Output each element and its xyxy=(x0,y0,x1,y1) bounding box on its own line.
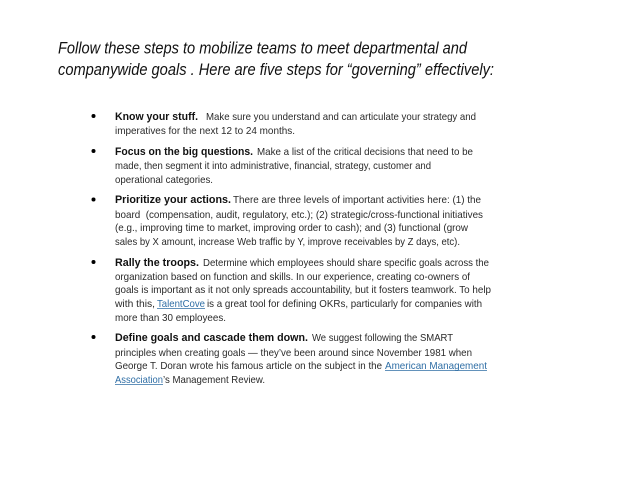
bullet: define goals and cascade them down xyxy=(92,332,487,386)
bullet: define goals and cascade them down: Define goals and cascade them down. xyxy=(115,332,308,344)
bullet: define goals and cascade them down: American Management xyxy=(385,361,487,372)
heading: Follow these steps to mobilize teams to meet departmental and xyxy=(58,40,468,58)
bullet: prioritize your actions: board (compensation, audit, regulatory, etc.); (2) strategic/cross-functional initiatives xyxy=(115,210,483,221)
bullet: know your stuff xyxy=(92,111,476,137)
bullet: rally the troops: goals is important as it not only spreads accountability, but it fosters teamwork. To help xyxy=(115,285,491,296)
bullet: rally the troops: is a great tool for defining OKRs, particularly for companies with xyxy=(207,299,482,310)
bullet: rally the troops: organization based on function and skills. In our experience, creating co-owners of xyxy=(115,272,470,283)
bullet: focus on the big questions: Focus on the big questions. xyxy=(115,146,253,158)
bullet: define goals and cascade them down: principles when creating goals — they’ve been around since November 1981 when xyxy=(115,348,472,359)
bullet: define goals and cascade them down: Association xyxy=(115,375,163,386)
heading xyxy=(58,40,494,79)
bullet: define goals and cascade them down: We suggest following the SMART xyxy=(312,333,453,344)
bullet: define goals and cascade them down: ’s Management Review. xyxy=(163,375,265,386)
heading: companywide goals . Here are five steps for “governing” effectively: xyxy=(58,61,494,79)
bullet: rally the troops: Rally the troops. xyxy=(115,257,199,269)
bullet: know your stuff: imperatives for the next 12 to 24 months. xyxy=(115,126,295,137)
bullet: focus on the big questions: operational categories. xyxy=(115,175,213,186)
bullet: know your stuff: Know your stuff. xyxy=(115,111,198,123)
bullet: prioritize your actions xyxy=(92,194,483,248)
bullet: rally the troops: Determine which employees should share specific goals across the xyxy=(203,258,489,269)
bullet: prioritize your actions: (e.g., improving time to market, improving order to cash); and (3) functional (grow xyxy=(115,223,469,234)
bullet: prioritize your actions: sales by X amount, increase Web traffic by Y, improve receivables by Z days, etc). xyxy=(115,237,460,248)
bullet: rally the troops xyxy=(92,257,491,324)
bullet: focus on the big questions: Make a list of the critical decisions that need to be xyxy=(257,147,473,158)
bullet: focus on the big questions: made, then segment it into administrative, financial, strategy, customer and xyxy=(115,161,431,172)
bullet: rally the troops: TalentCove xyxy=(157,299,205,310)
bullet: prioritize your actions: Prioritize your actions. xyxy=(115,194,231,206)
bullet: define goals and cascade them down: George T. Doran wrote his famous article on the subject in the xyxy=(115,361,382,372)
bullet: rally the troops: more than 30 employees. xyxy=(115,313,226,324)
bullet: know your stuff: Make sure you understand and can articulate your strategy and xyxy=(206,112,476,123)
bullet: rally the troops: with this, xyxy=(114,299,155,310)
bullet: focus on the big questions xyxy=(92,146,473,186)
bullet: prioritize your actions: There are three levels of important activities here: (1) the xyxy=(233,195,481,206)
